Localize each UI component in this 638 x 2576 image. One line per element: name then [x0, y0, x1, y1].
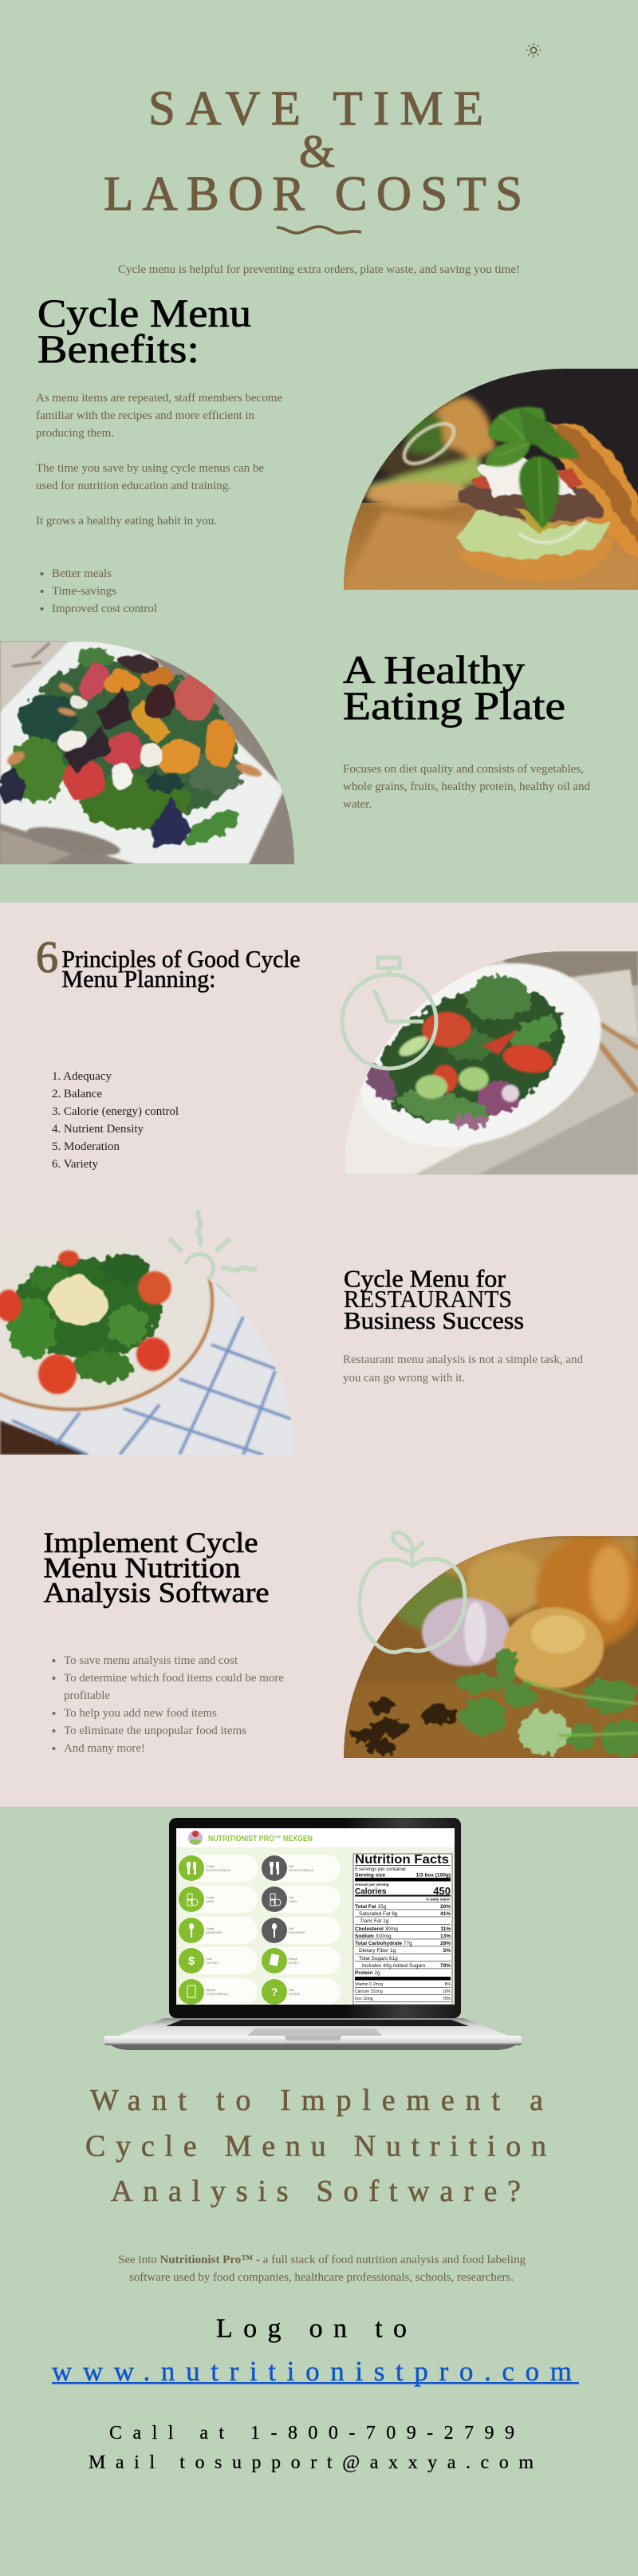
heading: implement cycle menu nutrition analysis software: Analysis Software — [43, 1577, 270, 1609]
heading: principles of good cycle menu planning — [62, 945, 300, 993]
menu buttons: RECIPE/FORMULA — [206, 1869, 231, 1872]
heading: cycle menu for restaurants — [344, 1264, 524, 1334]
text block: benefits description — [36, 392, 282, 527]
nutrition facts label: Trans Fat 1g — [360, 1918, 389, 1924]
website link: www.nutritionistpro.com — [52, 2356, 572, 2387]
nutrition facts label: Nutrition Facts — [355, 1853, 449, 1867]
text block: restaurants description: Restaurant menu analysis is not a simple task, and — [343, 1353, 584, 1366]
nutrition facts label: Calories — [355, 1887, 387, 1896]
nutrition facts label: Total Carbohydrate 77g — [355, 1941, 412, 1946]
nutrition facts label: 8% — [445, 1982, 451, 1987]
nutrition facts label: 20% — [440, 1904, 451, 1910]
nutrition facts label: 28% — [440, 1941, 451, 1946]
screen header: NUTRITIONIST PRO™ NEXGEN — [208, 1835, 313, 1843]
list: reasons to implement software: To help you add new food items — [64, 1707, 217, 1720]
menu buttons: LABEL — [206, 1900, 215, 1903]
list: reasons to implement software: profitable — [64, 1689, 110, 1702]
call to action heading: Analysis Software? — [111, 2175, 521, 2208]
menu buttons: Edit — [289, 1865, 293, 1868]
nutrition facts label: Total Fat 15g — [355, 1904, 387, 1910]
menu buttons: Create — [206, 1896, 215, 1899]
heading: principles of good cycle menu planning: Principles of Good Cycle — [62, 945, 300, 973]
title: & — [299, 125, 335, 177]
text block: benefits description: It grows a healthy eating habit in you. — [36, 515, 217, 527]
nutrition facts label: Protein 2g — [355, 1970, 380, 1976]
list: benefits bullets: Better meals — [52, 567, 112, 580]
nutrition facts label: 70% — [443, 1997, 451, 2001]
text block: nutritionist pro description: software used by food companies, healthcare professionals, schools, researchers. — [129, 2271, 514, 2284]
nutrition facts label: 10% — [443, 1989, 451, 1994]
nutrition facts label: Cholesterol 30mg — [355, 1926, 398, 1932]
menu buttons: Edit — [289, 1896, 293, 1899]
icon: stopwatch — [342, 958, 436, 1069]
photo: healthy plate — [0, 630, 294, 864]
nutrition facts label: 5% — [443, 1948, 451, 1954]
title: SAVE TIME — [148, 82, 483, 136]
nutrition facts label: Serving size — [355, 1872, 385, 1879]
nutrition facts label: Sodium 310mg — [355, 1934, 392, 1939]
list: benefits bullets: Time-savings — [52, 585, 116, 598]
menu buttons: Recipe — [289, 1958, 297, 1961]
photo: salad bowl — [344, 951, 638, 1175]
list: six principles: 1. Adequacy — [52, 1070, 112, 1083]
nutrition facts label: 5 servings per container — [355, 1867, 406, 1872]
text block: healthy plate description: Focuses on diet quality and consists of vegetables, — [343, 763, 584, 776]
nutrition facts label: Iron 12mg — [355, 1997, 373, 2001]
list: reasons to implement software: And many more! — [64, 1742, 145, 1755]
menu buttons: Create — [206, 1865, 215, 1868]
menu buttons: COSTING — [206, 1962, 219, 1965]
text block: benefits description: producing them. — [36, 427, 114, 440]
heading: implement cycle menu nutrition analysis software — [43, 1527, 270, 1609]
title wavy underline — [277, 227, 361, 233]
screen contents — [176, 1828, 455, 2005]
icon: apple outline — [360, 1533, 465, 1652]
menu buttons: Help — [289, 1989, 294, 1992]
nutrition facts label: Total Sugars 61g — [359, 1956, 398, 1962]
heading: principles of good cycle menu planning: Menu Planning: — [62, 965, 215, 993]
nutrition facts label: 11% — [440, 1926, 451, 1932]
menu buttons: $ — [188, 1954, 195, 1968]
background: green bottom section — [0, 1807, 638, 2576]
menu buttons: Edit — [289, 1927, 293, 1930]
menu buttons: RECIPE/FORMULA — [289, 1869, 314, 1872]
number 6: 6 — [36, 933, 58, 982]
nutrition facts label: % Daily Value* — [426, 1898, 451, 1901]
menu buttons: Food — [206, 1958, 212, 1961]
text block: healthy plate description: whole grains, fruits, healthy protein, healthy oil and — [343, 780, 590, 793]
text block: restaurants description: you can go wrong with it. — [343, 1372, 465, 1385]
heading: a healthy eating plate — [343, 647, 565, 728]
laptop base — [104, 2018, 522, 2050]
text block: restaurants description — [343, 1353, 584, 1385]
heading: cycle menu benefits: Benefits: — [37, 326, 199, 371]
heading: a healthy eating plate: A Healthy — [343, 647, 525, 692]
text block: nutritionist pro description: See into Nutritionist Pro™ - a full stack of food nutrition analysis and food labeling — [118, 2254, 526, 2266]
nutrition facts label: Dietary Fiber 1g — [359, 1948, 396, 1954]
heading: cycle menu for restaurants: RESTAURANTS — [344, 1285, 512, 1313]
menu buttons: LABEL — [289, 1900, 297, 1903]
heading: a healthy eating plate: Eating Plate — [343, 683, 565, 728]
menu buttons: CENTER — [289, 1993, 301, 1996]
call to action heading: Cycle Menu Nutrition — [85, 2129, 546, 2163]
text block: nutritionist pro description — [118, 2254, 526, 2284]
contact details: Call at 1-800-709-2799 — [109, 2423, 514, 2444]
icon: small sun — [526, 43, 541, 57]
menu buttons: INGREDIENT — [289, 1931, 306, 1934]
nutrition facts label: 41% — [440, 1911, 451, 1917]
list: reasons to implement software: To save menu analysis time and cost — [64, 1654, 238, 1667]
nutrition facts label: 1/3 box (100g) — [416, 1872, 451, 1879]
list: six principles — [52, 1070, 179, 1171]
menu buttons: FOOD/FORMULA — [206, 1993, 229, 1996]
call to action heading — [85, 2084, 546, 2208]
nutrition facts label: Calcium 151mg — [355, 1989, 383, 1994]
nutrition facts label: Includes 40g Added Sugars — [362, 1963, 426, 1969]
screen header — [176, 1828, 455, 1847]
list: benefits bullets: Improved cost control — [52, 603, 157, 615]
text block: healthy plate description — [343, 763, 590, 811]
text block: benefits description: used for nutrition education and training. — [36, 480, 231, 492]
nutrition facts label: Vitamin D 2mcg — [355, 1982, 383, 1987]
heading: implement cycle menu nutrition analysis software: Implement Cycle — [43, 1527, 258, 1559]
list: benefits bullets — [40, 567, 157, 615]
call to action heading: Want to Implement a — [90, 2084, 543, 2117]
list: reasons to implement software: To determine which food items could be more — [64, 1672, 284, 1685]
title — [104, 82, 522, 221]
heading: implement cycle menu nutrition analysis software: Menu Nutrition — [43, 1551, 241, 1583]
list: six principles: 2. Balance — [52, 1088, 102, 1100]
heading: cycle menu for restaurants: Cycle Menu for — [344, 1264, 506, 1293]
text block: healthy plate description: water. — [343, 798, 372, 811]
heading: cycle menu for restaurants: Business Success — [344, 1306, 524, 1334]
background: pink middle section — [0, 903, 638, 1807]
text block: benefits description: As menu items are repeated, staff members become — [36, 392, 282, 405]
list: six principles: 5. Moderation — [52, 1140, 120, 1153]
icon: sun rays — [151, 1211, 257, 1326]
laptop bezel — [169, 1818, 461, 2018]
photo: vegetables — [344, 1535, 638, 1758]
nutrition facts label: Amount per serving — [355, 1883, 389, 1887]
nutrition facts label: 13% — [440, 1934, 451, 1939]
nutrition facts label: 79% — [440, 1963, 451, 1969]
menu buttons: INGREDIENT — [206, 1931, 223, 1934]
list: reasons to implement software: To eliminate the unpopular food items — [64, 1725, 246, 1737]
menu buttons — [179, 1855, 341, 2005]
title: LABOR COSTS — [104, 168, 522, 221]
heading: cycle menu benefits — [37, 290, 251, 371]
photo: burger — [344, 369, 638, 590]
list: six principles: 3. Calorie (energy) control — [52, 1105, 179, 1118]
nutrition facts label — [353, 1853, 452, 2005]
background: green top section — [0, 0, 638, 903]
laptop with nutrition software screenshot — [104, 1818, 522, 2050]
laptop screen — [176, 1828, 455, 2005]
list: reasons to implement software — [53, 1654, 284, 1755]
menu buttons: BOOKS — [289, 1962, 299, 1965]
text block: benefits description: The time you save by using cycle menus can be — [36, 462, 264, 475]
list: six principles: 6. Variety — [52, 1158, 99, 1171]
log on to: Log on to — [216, 2314, 407, 2343]
nutrition facts label: Saturated Fat 8g — [359, 1911, 398, 1917]
subtitle: Cycle menu is helpful for preventing extra orders, plate waste, and saving you time! — [118, 263, 520, 276]
text block: benefits description: familiar with the recipes and more efficient in — [36, 409, 255, 422]
heading: cycle menu benefits: Cycle Menu — [37, 290, 251, 335]
menu buttons: Reports — [206, 1989, 216, 1992]
contact details: Mail tosupport@axxya.com — [89, 2452, 534, 2473]
contact details — [89, 2423, 534, 2473]
list: six principles: 4. Nutrient Density — [52, 1123, 144, 1136]
menu buttons: Create — [206, 1927, 215, 1930]
nutrition facts label: 450 — [433, 1885, 451, 1897]
menu buttons: ? — [271, 1985, 278, 1998]
photo: tomato plate on check napkin — [0, 1248, 294, 1455]
